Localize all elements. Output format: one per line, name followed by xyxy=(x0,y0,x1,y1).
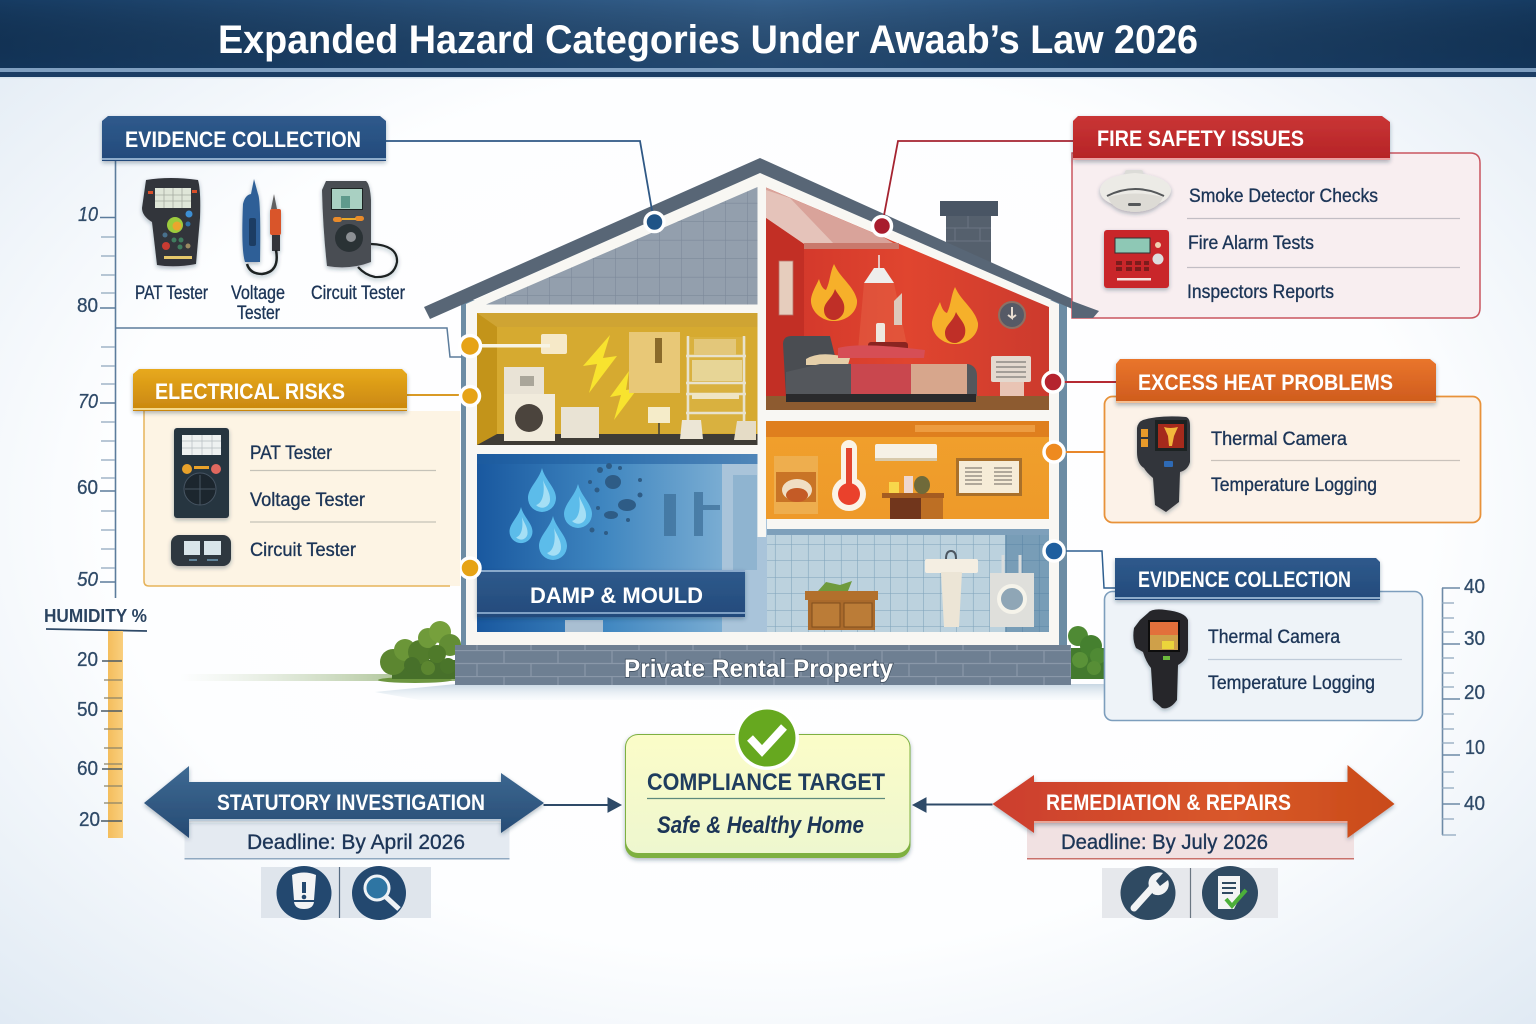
right measurement scale: 30 xyxy=(1464,628,1485,650)
flames xyxy=(811,264,857,321)
lamp xyxy=(858,255,908,350)
left measurement axis: 80 xyxy=(77,295,98,317)
humidity scale: HUMIDITY % xyxy=(44,606,147,626)
tool labels: PAT Tester xyxy=(135,282,208,304)
outer wall xyxy=(461,300,1067,645)
ground shadow and streak xyxy=(180,674,1104,700)
bed xyxy=(783,336,977,402)
heading xyxy=(102,116,386,161)
lightning bolts xyxy=(583,335,638,420)
items: Temperature Logging xyxy=(1211,474,1377,496)
left measurement axis: 70 xyxy=(78,391,98,413)
left shelf xyxy=(774,456,818,514)
wall heater xyxy=(991,356,1031,396)
humidity scale: 20 xyxy=(79,809,100,831)
shrub: left xyxy=(378,621,461,683)
compliance target card xyxy=(625,706,910,858)
connector: blue xyxy=(1060,551,1115,588)
roof xyxy=(424,158,1099,319)
panel: fire safety issues xyxy=(1072,116,1480,318)
arrow to compliance (right) xyxy=(913,798,992,812)
left measurement axis xyxy=(77,161,116,598)
humidity scale: 20 xyxy=(77,649,98,671)
connector: fire to roof xyxy=(882,141,1073,226)
tool labels: Voltage xyxy=(231,282,285,304)
right measurement scale: 10 xyxy=(1465,737,1485,759)
figures silhouette xyxy=(664,492,720,536)
washing machine xyxy=(990,555,1034,627)
socket and line xyxy=(541,334,567,354)
repair icons xyxy=(1102,866,1278,920)
items: Fire Alarm Tests xyxy=(1188,232,1314,254)
side table xyxy=(882,476,944,519)
icon: voltage tester xyxy=(242,179,281,274)
marker dots xyxy=(460,212,1064,578)
icon: check badge xyxy=(735,706,799,770)
humidity scale: 60 xyxy=(77,758,98,780)
title banner xyxy=(0,0,1536,78)
deadline bar: Deadline: By April 2026 xyxy=(247,830,465,854)
wall frame xyxy=(466,170,1059,645)
icon: wrench xyxy=(1120,866,1176,920)
items xyxy=(1208,626,1402,694)
icon: alert xyxy=(276,866,332,920)
connector: electrical xyxy=(407,394,462,396)
tool labels: Tester xyxy=(237,302,280,324)
thermometer xyxy=(832,440,866,511)
heading: EVIDENCE COLLECTION xyxy=(1138,567,1351,592)
heading: EXCESS HEAT PROBLEMS xyxy=(1138,370,1393,395)
icon: checklist xyxy=(1202,866,1258,920)
humidity scale xyxy=(44,606,147,838)
shelving xyxy=(686,336,746,433)
items: Voltage Tester xyxy=(250,489,365,511)
items xyxy=(1187,185,1460,303)
water drops xyxy=(510,468,592,560)
items: Thermal Camera xyxy=(1211,428,1347,450)
connector: axis to socket xyxy=(115,328,462,357)
sink xyxy=(925,551,978,627)
remediation & repairs arrow xyxy=(992,765,1394,860)
icon: thermal camera xyxy=(1133,609,1188,708)
icon: magnifier xyxy=(352,866,406,920)
private rental property label: Private Rental Property xyxy=(624,655,893,683)
connector: heat xyxy=(1060,381,1116,383)
items xyxy=(250,442,436,561)
clock xyxy=(999,302,1025,328)
room: fire xyxy=(766,188,1049,410)
compliance target card: COMPLIANCE TARGET xyxy=(647,769,885,796)
right measurement scale xyxy=(1442,576,1485,835)
heading: FIRE SAFETY ISSUES xyxy=(1097,126,1304,151)
left measurement axis: 60 xyxy=(77,477,98,499)
heading xyxy=(1116,359,1436,403)
room: heat xyxy=(766,421,1049,519)
icon: circuit tester xyxy=(322,181,397,277)
room: electrical xyxy=(477,313,758,445)
items xyxy=(1211,428,1460,496)
air conditioner xyxy=(875,444,937,461)
washer xyxy=(504,367,555,441)
deadline bar xyxy=(184,823,510,860)
damp & mould label: DAMP & MOULD xyxy=(530,583,703,608)
deadline bar xyxy=(1027,823,1354,860)
wall chart xyxy=(956,458,1022,496)
icon: fire alarm panel xyxy=(1104,230,1169,288)
right measurement scale: 40 xyxy=(1464,793,1485,815)
panel: excess heat problems xyxy=(1104,359,1480,522)
chimney xyxy=(940,201,998,265)
items: Circuit Tester xyxy=(250,539,356,561)
cabinet xyxy=(805,581,878,630)
icon: smoke detector xyxy=(1100,170,1171,212)
title: Expanded Hazard Categories Under Awaab’s Law 2026 xyxy=(218,18,1198,62)
roof eave overlap xyxy=(1072,301,1099,318)
house xyxy=(424,158,1099,685)
connector: electrical panel xyxy=(450,568,462,586)
items: PAT Tester xyxy=(250,442,332,464)
tool labels xyxy=(135,282,405,324)
panel: electrical risks xyxy=(133,369,460,586)
items: Inspectors Reports xyxy=(1187,281,1334,303)
icon: PAT tester xyxy=(142,178,200,266)
humidity scale: 50 xyxy=(77,699,98,721)
cupboard xyxy=(629,332,680,393)
room: damp xyxy=(477,454,767,632)
icon: thermal camera xyxy=(1137,416,1190,512)
statutory investigation arrow xyxy=(144,766,544,860)
heading xyxy=(133,369,407,411)
heading: ELECTRICAL RISKS xyxy=(155,379,345,404)
left measurement axis: 10 xyxy=(78,204,98,226)
shrub: right xyxy=(1068,626,1106,679)
statutory investigation arrow: STATUTORY INVESTIGATION xyxy=(217,790,485,815)
remediation & repairs arrow: REMEDIATION & REPAIRS xyxy=(1046,790,1291,815)
panel: evidence collection (thermal) xyxy=(1104,558,1422,720)
items: Smoke Detector Checks xyxy=(1189,185,1378,207)
right measurement scale: 40 xyxy=(1464,576,1485,598)
left measurement axis: 50 xyxy=(77,569,98,591)
right measurement scale: 20 xyxy=(1464,682,1485,704)
panel: evidence collection (tools) xyxy=(102,116,405,324)
deadline bar: Deadline: By July 2026 xyxy=(1061,830,1268,854)
room: bathroom xyxy=(767,529,1049,632)
mould spots xyxy=(588,463,642,535)
heading xyxy=(1073,116,1390,160)
items: Thermal Camera xyxy=(1208,626,1340,648)
damp & mould label xyxy=(477,570,745,617)
icon: compact device xyxy=(171,535,231,566)
foundation xyxy=(455,645,1071,685)
investigation icons xyxy=(261,866,431,920)
arrow to compliance (left) xyxy=(544,798,621,812)
heading: EVIDENCE COLLECTION xyxy=(125,127,361,152)
attic tiled wall xyxy=(486,187,758,304)
items: Temperature Logging xyxy=(1208,672,1375,694)
connector: orange xyxy=(1060,451,1127,453)
icon: multimeter xyxy=(174,428,229,518)
compliance target card: Safe & Healthy Home xyxy=(657,812,864,839)
connector: evidence to roof xyxy=(386,141,654,222)
tool labels: Circuit Tester xyxy=(311,282,405,304)
heading xyxy=(1115,558,1380,600)
